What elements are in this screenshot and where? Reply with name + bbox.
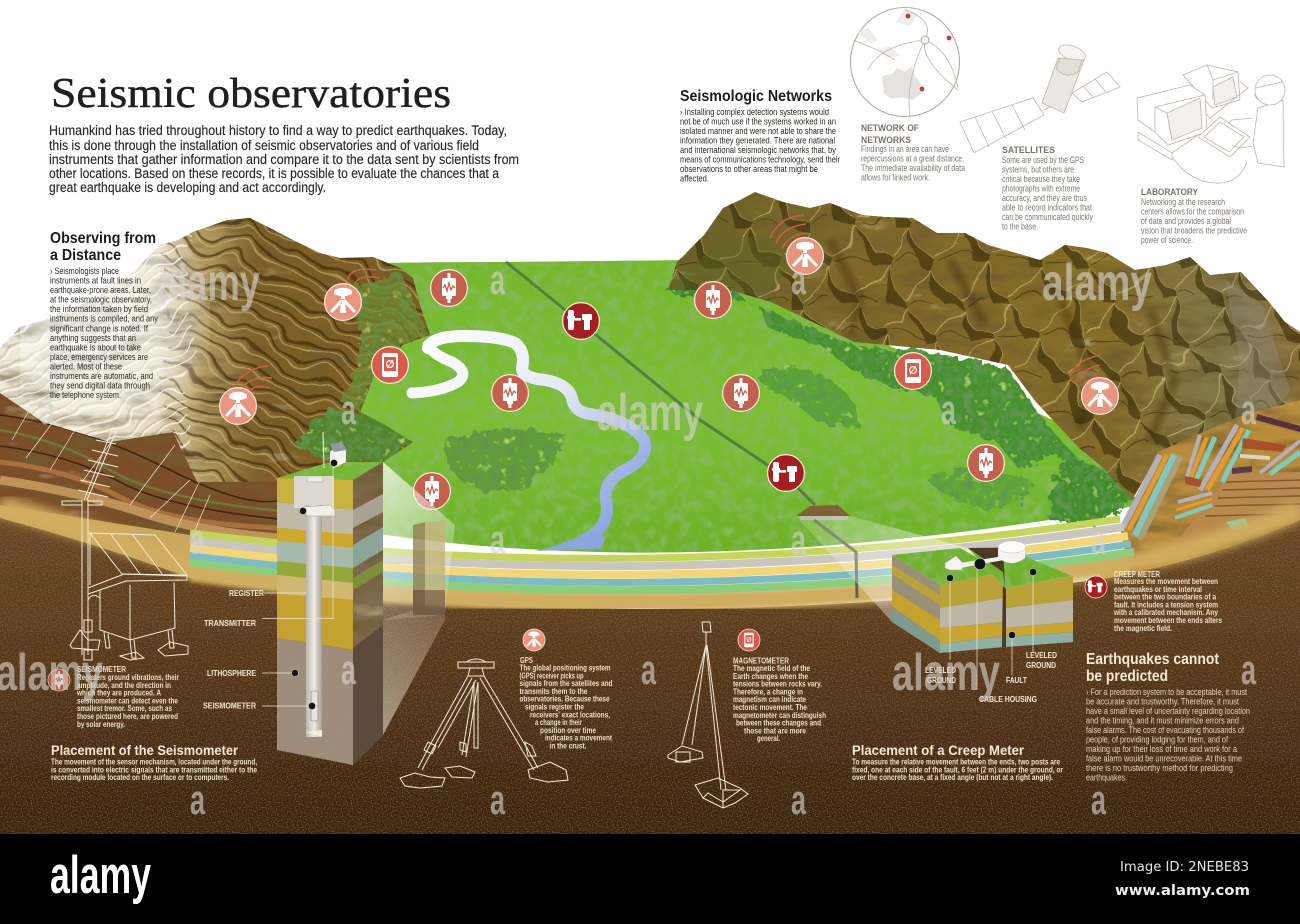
network of networks text: allows for linked work. — [861, 172, 930, 182]
laboratory text: Networking at the research — [1141, 197, 1225, 207]
placement of the seismometer: Placement of the Seismometer — [51, 743, 239, 758]
satellites text: SATELLITES — [1002, 145, 1055, 156]
earthquakes cannot be predicted: false alarms. The cost of evacuating thousands of — [1086, 725, 1244, 735]
panel: observing from a distance: they send digital data through — [50, 381, 150, 391]
stock watermark: alamy — [597, 384, 703, 442]
panel: seismologic networks: and international seismologic networks that, by — [680, 145, 836, 155]
laboratory text: centers allows for the comparison — [1141, 206, 1244, 216]
panel: observing from a distance: Observing from — [50, 230, 156, 247]
stock watermark: a — [490, 256, 505, 303]
seismometer borehole block — [262, 432, 455, 765]
creep meter text: movement between the ends alters — [1114, 616, 1222, 625]
footer bar — [0, 834, 1300, 924]
magnetometer text: Earth changes when the — [733, 672, 808, 681]
earthquakes cannot be predicted: there is no trustworthy method for predicting — [1086, 763, 1233, 773]
network of networks text: NETWORK OF — [861, 123, 919, 134]
pipe — [306, 505, 322, 737]
magnetometer text: The magnetic field of the — [733, 664, 810, 673]
panel: seismologic networks: affected. — [680, 174, 709, 184]
satellites text: can be communicated quickly — [1002, 212, 1093, 222]
panel: seismologic networks: observations to other areas that might be — [680, 164, 818, 174]
seismometer text: those pictured here, are powered — [77, 712, 178, 721]
seismometer text: seismometer can detect even the — [77, 696, 178, 705]
GPS text: a change in their — [535, 718, 582, 727]
panel: seismologic networks: › Installing complex detection systems would — [680, 107, 829, 117]
laboratory text: power of science. — [1141, 235, 1193, 245]
stock watermark: alamy — [1042, 254, 1152, 312]
panel: seismologic networks: means of communications technology, send their — [680, 154, 840, 164]
placement of a creep meter — [852, 743, 1063, 782]
GPS tripod drawing — [400, 659, 568, 788]
stock watermark: a — [1241, 386, 1256, 433]
earthquakes cannot be predicted: be accurate and trustworthy. Therefore, it must — [1086, 696, 1239, 706]
panel: observing from a distance — [50, 230, 158, 400]
creep block labels: LEVELED — [1026, 651, 1057, 660]
GPS text: signals register the — [525, 702, 584, 712]
solar housing — [323, 432, 347, 468]
ghost slice — [413, 520, 445, 615]
placement of the seismometer: recording module located on the surface or to computers. — [51, 773, 229, 782]
panel: observing from a distance: › Seismologists place — [50, 266, 119, 276]
creep meter text — [1113, 570, 1222, 633]
dots — [291, 459, 338, 710]
panel: observing from a distance: at the seismologic observatory, — [50, 295, 152, 305]
laboratory illustration — [1137, 65, 1285, 183]
projection wedge — [796, 516, 1072, 622]
intro paragraph: great earthquake is developing and act accordingly. — [49, 180, 326, 195]
intro paragraph: Humankind has tried throughout history to find a way to predict earthquakes. Today, — [49, 123, 507, 138]
seismometer text: SEISMOMETER — [77, 665, 126, 674]
satellite illustration — [960, 42, 1120, 153]
right mountain range — [668, 192, 1300, 500]
site url: www.alamy.com — [1115, 883, 1250, 899]
earthquakes cannot be predicted — [1086, 651, 1250, 783]
creep block labels — [925, 651, 1057, 704]
panel: observing from a distance: significant change is noted. If — [50, 323, 148, 333]
green valley floor — [300, 260, 1140, 553]
placement of a creep meter: To measure the relative movement between the ends, two posts are — [852, 758, 1060, 766]
satellites text — [1002, 145, 1093, 232]
magnetometer text: Therefore, a change in — [733, 687, 803, 696]
panel: observing from a distance: the telephone system. — [50, 390, 121, 400]
intro paragraph: other locations. Based on these records, it is possible to evaluate the chances that a — [49, 166, 499, 181]
borehole labels: SEISMOMETER — [203, 702, 256, 710]
laboratory text: vision that broadens the predictive — [1141, 226, 1247, 236]
seismometer text: amplitude, and the direction in — [77, 681, 171, 690]
creep meter text: fault. It includes a tension system — [1114, 600, 1218, 609]
solar-powered seismometer station drawing — [62, 430, 188, 660]
dots — [946, 558, 1036, 638]
stock watermark: a — [1241, 646, 1256, 693]
creep meter text: with a calibrated mechanism. Any — [1113, 608, 1218, 617]
earthquakes cannot be predicted: Earthquakes cannot — [1086, 651, 1219, 668]
stock watermark: alamy — [0, 644, 103, 702]
magnetometer text: magnetometer can distinguish — [733, 711, 826, 720]
satellites text: Some are used by the GPS — [1002, 155, 1084, 165]
GPS text: position over time — [540, 726, 596, 735]
small key icons — [48, 576, 1107, 691]
earthquakes cannot be predicted: be predicted — [1086, 668, 1168, 685]
earthquakes cannot be predicted: people, of providing lodging for them, and of — [1086, 735, 1228, 745]
creep meter text: between the two boundaries of a — [1114, 593, 1216, 602]
GPS text: indicates a movement — [545, 734, 612, 743]
magnetometer text: tensions between rocks vary. — [733, 680, 822, 689]
creep meter text: the magnetic field. — [1114, 624, 1172, 633]
stock watermark: alamy — [892, 644, 1000, 702]
stock watermark: a — [941, 386, 956, 433]
panel: observing from a distance: instruments are automatic, and — [50, 371, 153, 381]
intro paragraph: this is done through the installation of seismic observatories and of various field — [49, 138, 479, 153]
river — [412, 336, 645, 551]
earthquakes cannot be predicted: and the timing, and it must minimize errors and — [1086, 716, 1239, 726]
placement of a creep meter: Placement of a Creep Meter — [852, 743, 1025, 758]
panel: seismologic networks — [680, 88, 840, 184]
laboratory text: LABORATORY — [1141, 187, 1199, 198]
seismometer text: Registers ground vibrations, their — [77, 673, 179, 682]
panel: observing from a distance: a Distance — [50, 247, 121, 264]
stock watermark: a — [1091, 516, 1106, 563]
GPS text: (GPS) receiver picks up — [520, 671, 584, 680]
placement of a creep meter: fixed, one at each side of the fault, 6 feet (2 m) under the ground, or — [852, 765, 1063, 774]
bore hole — [294, 476, 334, 508]
seismometer text: smallest tremor. Some, such as — [77, 704, 172, 713]
panel: seismologic networks: not be of much use if the systems worked in an — [680, 116, 836, 126]
laboratory text: of data and provides a global — [1141, 216, 1231, 226]
panel: seismologic networks: information they generated. There are national — [680, 136, 835, 146]
borehole labels: REGISTER — [229, 589, 264, 598]
network of networks text: The immediate availability of data — [861, 163, 965, 173]
forest patches — [445, 284, 1135, 525]
intro paragraph — [49, 123, 519, 195]
leader lines — [950, 564, 1033, 690]
right cut-away strata — [1120, 400, 1300, 575]
fault line — [506, 262, 815, 505]
fault trench — [796, 505, 857, 598]
stock watermark: a — [791, 516, 806, 563]
magnetometer text — [733, 656, 826, 743]
GPS text — [520, 656, 613, 750]
stock watermark — [0, 254, 1256, 823]
magnetometer text: between these changes and — [736, 719, 821, 728]
underground body — [0, 518, 1300, 834]
network of networks text: NETWORKS — [861, 135, 911, 146]
stock watermark: a — [341, 646, 356, 693]
stock watermark: a — [190, 516, 205, 563]
panel: observing from a distance: the information taken by field — [50, 304, 148, 314]
borehole labels — [203, 589, 264, 710]
panel: observing from a distance: earthquake-prone areas. Later, — [50, 285, 151, 295]
satellites text: critical because they take — [1002, 174, 1080, 184]
earthquakes cannot be predicted: earthquakes. — [1086, 773, 1127, 783]
stock watermark: a — [641, 646, 656, 693]
GPS text: receivers' exact locations, — [530, 710, 610, 719]
panel: observing from a distance: instruments at fault lines in — [50, 276, 141, 286]
network of networks text — [861, 123, 965, 182]
seismometer text: by solar energy. — [77, 720, 125, 729]
intro paragraph: instruments that gather information and compare it to the data sent by scientists from — [49, 152, 519, 167]
image id: Image ID: 2NEBE83 — [1120, 860, 1249, 875]
left cut-away strata — [0, 385, 300, 538]
placement of a creep meter: over the concrete base, at a fixed angle (but not at a right angle). — [852, 773, 1053, 782]
creep block labels: GROUND — [927, 676, 956, 685]
magnetometer text: those that are more — [744, 726, 806, 735]
register box — [303, 505, 335, 516]
placement of the seismometer: is converted into electric signals that are transmitted either to the — [51, 765, 257, 774]
placement of the seismometer — [51, 743, 257, 782]
creep block labels: LEVELED — [925, 666, 956, 675]
satellites text: able to record indicators that — [1002, 202, 1092, 212]
panel: observing from a distance: alerted. Most of these — [50, 362, 122, 372]
borehole labels: TRANSMITTER — [204, 619, 256, 628]
tan bed under the strata — [0, 480, 1300, 605]
stock watermark: a — [341, 386, 356, 433]
panel: observing from a distance: place, emergency services are — [50, 352, 148, 362]
title: Seismic observatories — [51, 71, 451, 117]
satellites text: photographs with extreme — [1002, 184, 1080, 194]
leader lines — [262, 463, 333, 706]
panel: observing from a distance: earthquake is about to take — [50, 342, 141, 352]
laboratory text — [1141, 187, 1247, 245]
cast shade — [383, 600, 445, 735]
network of networks text: Findings in an area can have — [861, 144, 949, 154]
sensor capsule — [311, 691, 318, 721]
projection wedge — [383, 462, 455, 620]
satellites text: to the base. — [1002, 222, 1038, 232]
footer logo: alamy — [50, 846, 151, 905]
magnetometer drawing — [668, 622, 748, 808]
panel: seismologic networks: Seismologic Networks — [680, 88, 832, 105]
earthquakes cannot be predicted: › For a prediction system to be acceptable, it must — [1086, 687, 1247, 697]
earthquakes cannot be predicted: false alarm would be unrecoverable. At this time — [1086, 754, 1242, 764]
GPS text: signals from the satellites and — [520, 679, 613, 688]
magnetometer text: MAGNETOMETER — [733, 656, 789, 666]
network icons on the landscape — [220, 215, 1118, 509]
creep meter block — [796, 516, 1073, 690]
creep block labels: GROUND — [1026, 661, 1056, 670]
network of networks text: repercussions at a great distance. — [861, 154, 964, 164]
creep meter text: CREEP METER — [1114, 570, 1160, 579]
placement of the seismometer: The movement of the sensor mechanism, located under the ground, — [51, 758, 257, 766]
borehole labels: LITHOSPHERE — [207, 669, 257, 678]
seismometer text: which they are produced. A — [76, 689, 161, 698]
signal arcs — [236, 215, 1100, 392]
stock watermark: a — [490, 776, 505, 823]
left mountain range — [0, 218, 430, 482]
satellites text: accuracy, and they are thus — [1002, 193, 1087, 203]
magnetometer text: general. — [757, 734, 780, 743]
seismometer text — [76, 665, 179, 729]
panel: seismologic networks: isolated manner and were not able to share the — [680, 126, 836, 136]
creep meter text: Measures the movement between — [1114, 577, 1218, 586]
GPS text: The global positioning system — [520, 664, 610, 672]
magnetometer text: magnetism can indicate — [733, 695, 806, 704]
creep meter text: earthquakes or time interval — [1114, 585, 1202, 594]
creep block labels: FAULT — [1006, 676, 1027, 685]
stock watermark: a — [791, 776, 806, 823]
magnetometer text: tectonic movement. The — [733, 703, 807, 712]
coloured strata bands — [190, 519, 1134, 604]
panel: observing from a distance: anything suggests that an — [50, 333, 136, 343]
tan glow along the ground line — [0, 506, 1300, 599]
globe illustration — [850, 8, 960, 116]
GPS text: in the crust. — [550, 742, 586, 750]
satellites text: systems, but others are — [1002, 164, 1074, 174]
earthquakes cannot be predicted: have a small level of uncertainty regarding location — [1086, 706, 1250, 716]
creep block labels: CABLE HOUSING — [979, 695, 1037, 704]
stock watermark: a — [40, 386, 55, 433]
GPS text: observatories. Because these — [520, 695, 610, 704]
meter housing and rod — [945, 541, 1026, 570]
GPS text: transmits them to the — [520, 687, 588, 696]
earthquakes cannot be predicted: making up for their loss of time and work for a — [1086, 744, 1237, 754]
stock watermark: a — [791, 256, 806, 303]
stock watermark: a — [490, 516, 505, 563]
stock watermark: alamy — [157, 254, 260, 312]
GPS text: GPS — [520, 656, 534, 665]
stock watermark: a — [190, 776, 205, 823]
stock watermark: a — [1091, 776, 1106, 823]
panel: observing from a distance: instruments is compiled, and any — [50, 314, 158, 324]
